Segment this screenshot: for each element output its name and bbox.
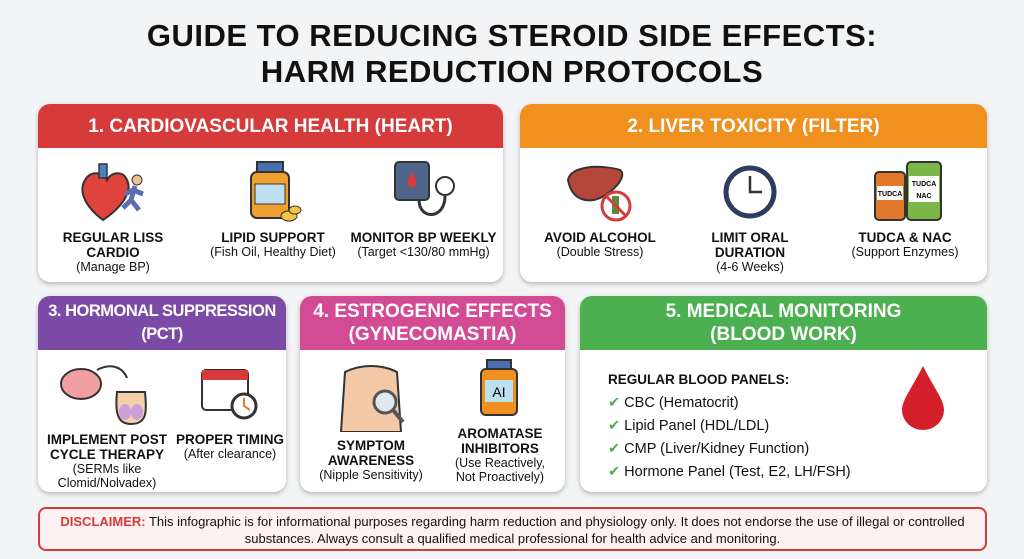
checklist: REGULAR BLOOD PANELS: xyxy=(608,372,789,387)
checklist: ✔ Lipid Panel (HDL/LDL) xyxy=(608,418,769,434)
item: oral duration: DURATION xyxy=(715,245,785,260)
heading: estrogenic xyxy=(300,296,565,350)
item: ai xyxy=(455,359,545,484)
item: oral duration: (4-6 Weeks) xyxy=(716,260,784,274)
heading: liver: 2. LIVER TOXICITY (FILTER) xyxy=(627,116,880,136)
item: tudca: TUDCA xyxy=(912,181,936,188)
item: bp: (Target <130/80 mmHg) xyxy=(357,245,490,259)
title xyxy=(147,18,877,89)
item: ai: AROMATASE xyxy=(458,426,542,441)
item: tudca xyxy=(852,161,958,259)
item: symptom: SYMPTOM xyxy=(337,438,405,453)
item: lipid xyxy=(210,161,336,259)
item: pct: IMPLEMENT POST xyxy=(47,432,167,447)
item: timing: PROPER TIMING xyxy=(176,432,284,447)
item: ai: (Use Reactively, xyxy=(455,456,545,470)
heading: liver xyxy=(520,104,987,148)
item: pct xyxy=(47,365,167,490)
heading: estrogenic: 4. ESTROGENIC EFFECTS xyxy=(313,301,552,322)
heading: hormonal: 3. HORMONAL SUPPRESSION xyxy=(48,302,276,320)
heading: monitoring: (BLOOD WORK) xyxy=(710,324,857,345)
item: alcohol: (Double Stress) xyxy=(557,245,643,259)
disclaimer: DISCLAIMER: This infographic is for informational purposes regarding harm reduction and physiology only. It does not endorse the use of illegal or controlled substances. Always consult a qualified medical professional for health advice and monitoring. xyxy=(60,514,965,546)
item: symptom: AWARENESS xyxy=(328,453,414,468)
item: pct: (SERMs like xyxy=(73,462,141,476)
disclaimer xyxy=(38,507,987,551)
item: lipid: (Fish Oil, Healthy Diet) xyxy=(210,245,336,259)
item: ai: AI xyxy=(492,384,506,400)
item: cardio xyxy=(63,163,163,274)
checklist xyxy=(608,372,851,480)
heading: cardiovascular: 1. CARDIOVASCULAR HEALTH (HEART) xyxy=(88,116,453,136)
item: pct: Clomid/Nolvadex) xyxy=(58,476,156,490)
panel: hormonal xyxy=(38,296,286,492)
item: oral duration: LIMIT ORAL xyxy=(711,230,789,245)
checklist: ✔ Hormone Panel (Test, E2, LH/FSH) xyxy=(608,464,851,480)
item: tudca: TUDCA & NAC xyxy=(858,230,952,245)
title: GUIDE TO REDUCING STEROID SIDE EFFECTS: xyxy=(147,18,877,53)
heading: monitoring: 5. MEDICAL MONITORING xyxy=(666,301,901,322)
item: ai: Not Proactively) xyxy=(456,470,544,484)
panel: liver xyxy=(520,104,987,282)
item: cardio: REGULAR LISS xyxy=(63,230,163,245)
item: symptom: (Nipple Sensitivity) xyxy=(319,468,423,482)
item: pct: CYCLE THERAPY xyxy=(50,447,164,462)
heading: estrogenic: (GYNECOMASTIA) xyxy=(349,324,516,345)
item: bp: MONITOR BP WEEKLY xyxy=(350,230,497,245)
item: tudca: NAC xyxy=(916,193,932,200)
item: tudca: (Support Enzymes) xyxy=(852,245,958,259)
item: symptom xyxy=(319,365,423,482)
panel: cardiovascular xyxy=(38,104,503,282)
item: timing: (After clearance) xyxy=(184,447,276,461)
panel: monitoring xyxy=(580,296,987,492)
checklist: ✔ CMP (Liver/Kidney Function) xyxy=(608,441,809,457)
heading: hormonal: (PCT) xyxy=(141,325,183,343)
icon: blood drop xyxy=(902,366,944,430)
item: tudca: TUDCA xyxy=(878,191,902,198)
item: timing xyxy=(176,369,284,461)
heading: cardiovascular xyxy=(38,104,503,148)
item: lipid: LIPID SUPPORT xyxy=(221,230,325,245)
item: alcohol xyxy=(544,166,656,259)
checklist: ✔ CBC (Hematocrit) xyxy=(608,395,739,411)
heading: monitoring xyxy=(580,296,987,350)
item: cardio: CARDIO xyxy=(86,245,140,260)
title: HARM REDUCTION PROTOCOLS xyxy=(261,54,763,89)
item: bp xyxy=(350,161,497,259)
panel: estrogenic xyxy=(300,296,565,492)
item: alcohol: AVOID ALCOHOL xyxy=(544,230,656,245)
heading: hormonal xyxy=(38,296,286,350)
item: cardio: (Manage BP) xyxy=(76,260,150,274)
item: oral duration xyxy=(711,166,789,274)
item: ai: INHIBITORS xyxy=(461,441,539,456)
